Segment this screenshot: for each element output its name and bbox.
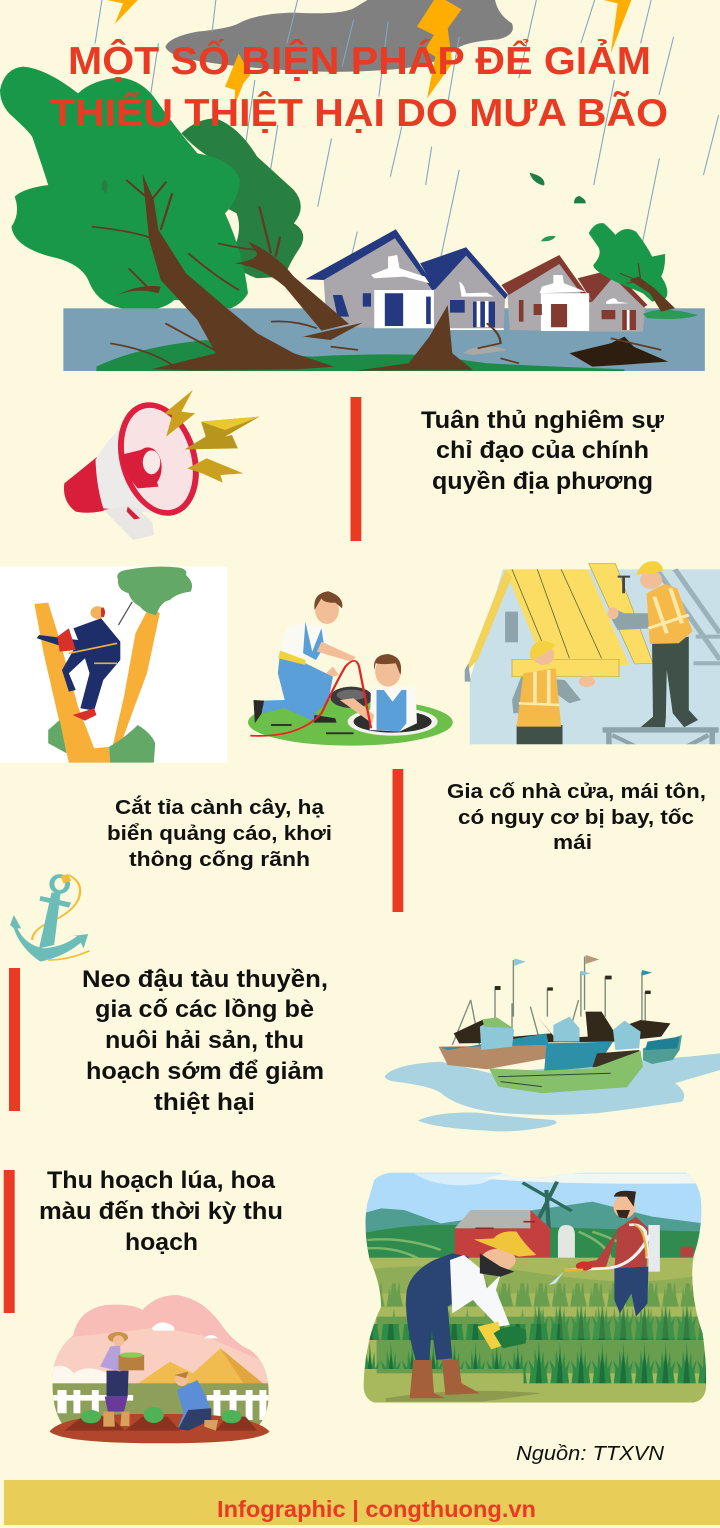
kneeling man <box>174 1372 218 1431</box>
text: follow local authority directions: chỉ đạo của chính <box>436 437 649 464</box>
flying leaves <box>529 173 586 241</box>
broken tree trunks and branches <box>115 173 473 371</box>
red-roof houses <box>501 255 647 332</box>
source note: Nguồn: TTXVN <box>516 1443 665 1465</box>
red drain cable <box>250 661 371 736</box>
back tree foliage <box>181 118 303 278</box>
text: anchor boats, secure fish cages, harvest early: thiệt hại <box>154 1089 255 1116</box>
front plants <box>363 1324 560 1369</box>
illustration: farmers in rice field <box>358 1170 712 1404</box>
blue-roof houses <box>305 229 508 330</box>
illustration: tree pruning worker <box>0 567 227 763</box>
text: reinforce houses and roofs: mái <box>553 832 592 854</box>
text: reinforce houses and roofs: có nguy cơ bị bay, tốc <box>458 807 694 829</box>
text: anchor boats, secure fish cages, harvest early: gia cố các lồng bè <box>95 996 314 1023</box>
text: harvest ripe rice and crops: hoạch <box>125 1229 198 1256</box>
woman harvesting <box>406 1231 536 1398</box>
divider bar 1 <box>350 397 361 541</box>
text: follow local authority directions: quyền địa phương <box>432 468 653 495</box>
text: anchor boats, secure fish cages, harvest early: Neo đậu tàu thuyền, <box>82 966 328 993</box>
worker in manhole <box>340 654 417 732</box>
illustration: garden harvest <box>46 1293 276 1443</box>
text: anchor boats, secure fish cages, harvest early: hoạch sớm để giảm <box>86 1058 324 1085</box>
green boat <box>489 1051 643 1093</box>
hero illustration: storm over flooded houses <box>0 0 719 371</box>
text: harvest ripe rice and crops <box>39 1167 283 1256</box>
rain streaks <box>95 0 719 290</box>
tractor <box>681 1247 693 1257</box>
footer band <box>4 1480 720 1525</box>
rock <box>463 346 505 355</box>
kneeling worker <box>253 591 356 723</box>
ground <box>96 340 625 371</box>
illustration: moored fishing boats <box>385 955 720 1131</box>
silo <box>558 1225 575 1258</box>
title <box>50 38 668 135</box>
text: anchor boats, secure fish cages, harvest early: nuôi hải sản, thu <box>105 1027 304 1054</box>
small tree on right <box>589 223 698 319</box>
cabins <box>480 1017 514 1050</box>
flood water <box>63 308 705 371</box>
title: THIỂU THIỆT HẠI DO MƯA BÃO <box>50 90 668 135</box>
text: harvest ripe rice and crops: Thu hoạch lúa, hoa <box>47 1167 276 1194</box>
worker holding plank <box>512 641 595 744</box>
text: reinforce houses and roofs <box>447 781 706 854</box>
tools <box>271 725 354 733</box>
text: prune trees, lower billboards, clear drains <box>107 795 332 871</box>
masts and flags <box>452 957 645 1057</box>
back plants <box>376 1283 696 1317</box>
divider bar 3 <box>9 968 20 1111</box>
illustration: workers clearing a manhole <box>248 591 453 746</box>
worker standing on scaffold <box>608 561 698 727</box>
green fields <box>363 1225 707 1260</box>
fallen debris <box>569 337 668 367</box>
text: anchor boats, secure fish cages, harvest early <box>82 966 328 1116</box>
storm cloud <box>165 0 513 72</box>
lightning bolts <box>107 0 631 107</box>
windmill <box>523 1182 572 1228</box>
barn <box>455 1210 550 1228</box>
text: follow local authority directions: Tuân thủ nghiêm sự <box>421 407 665 434</box>
title: MỘT SỐ BIỆN PHÁP ĐỂ GIẢM <box>68 38 651 83</box>
text: reinforce houses and roofs: Gia cố nhà cửa, mái tôn, <box>447 781 706 803</box>
water <box>385 1053 720 1115</box>
brown boat <box>439 1045 546 1069</box>
ground shadow <box>386 1391 542 1402</box>
illustration: roof repair workers <box>465 561 720 744</box>
text: prune trees, lower billboards, clear drains: thông cống rãnh <box>129 849 310 871</box>
text: prune trees, lower billboards, clear drains: biển quảng cáo, khơi <box>107 823 332 845</box>
scaffold <box>602 727 719 744</box>
divider bar 2 <box>392 769 403 912</box>
midfield <box>358 1258 712 1404</box>
divider bar 4 <box>4 1170 15 1313</box>
icon: megaphone with lightning <box>64 390 259 540</box>
front tree foliage <box>0 67 248 312</box>
woman with crate <box>100 1332 144 1427</box>
dark sails <box>454 1012 670 1043</box>
man spraying <box>549 1191 660 1317</box>
text: harvest ripe rice and crops: màu đến thời kỳ thu <box>39 1198 283 1225</box>
icon: anchor with rope <box>10 874 90 962</box>
text: prune trees, lower billboards, clear drains: Cắt tỉa cành cây, hạ <box>115 795 325 819</box>
back right boat <box>643 1035 682 1064</box>
text: follow local authority directions <box>421 407 665 495</box>
footer text: Infographic | congthuong.vn <box>217 1496 536 1522</box>
mountains <box>363 1202 703 1247</box>
